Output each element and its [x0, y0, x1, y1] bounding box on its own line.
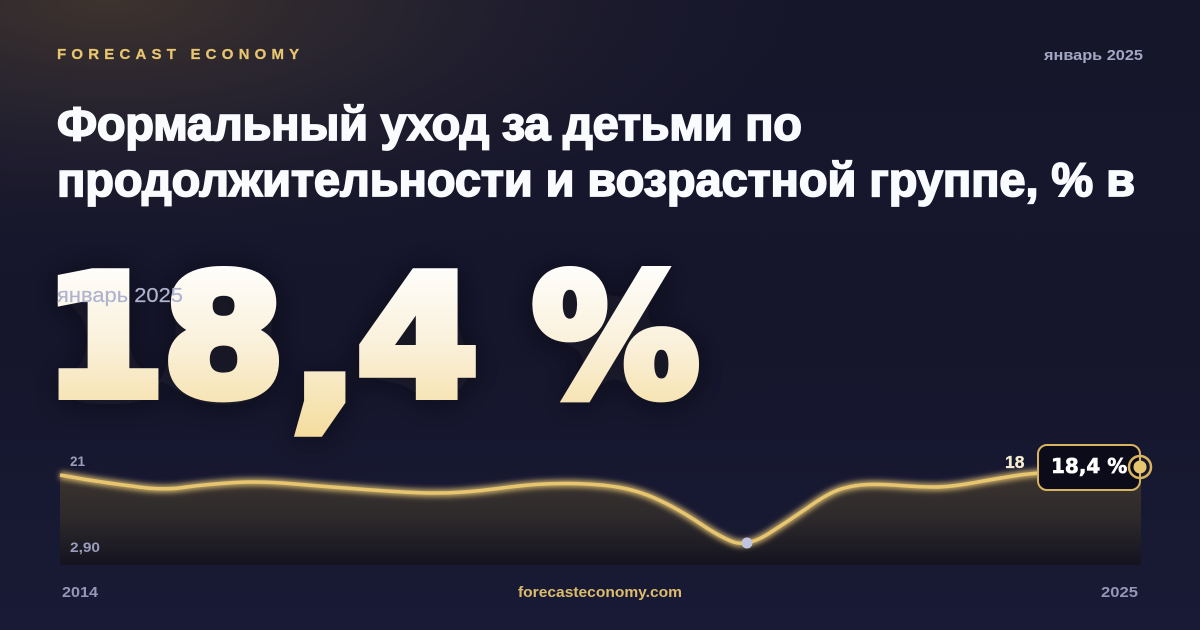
end year: 2025	[1101, 585, 1138, 601]
source url: forecasteconomy.com	[518, 584, 682, 601]
last rounded value label: 18	[1005, 452, 1025, 472]
minimum marker	[742, 538, 752, 548]
current value badge	[1038, 445, 1140, 490]
big value date overlay: январь 2025	[57, 284, 183, 307]
title: Формальный уход за детьми по	[57, 97, 802, 150]
current value badge: 18,4 %	[1051, 454, 1127, 478]
brand label: FORECAST ECONOMY	[57, 46, 304, 63]
chart line	[60, 467, 1141, 543]
axis max label: 21	[70, 454, 86, 469]
big value: 18,4	[43, 241, 479, 448]
big value	[43, 241, 699, 448]
big value: %	[532, 241, 699, 435]
start year: 2014	[62, 585, 98, 601]
current point marker	[1129, 456, 1151, 478]
line chart	[60, 467, 1141, 565]
chart line glow	[60, 467, 1141, 543]
chart area fill	[60, 467, 1141, 565]
title	[57, 97, 1135, 206]
title: продолжительности и возрастной группе, % в	[57, 153, 1135, 206]
date top right: январь 2025	[1044, 48, 1143, 64]
axis min label: 2,90	[70, 539, 100, 555]
